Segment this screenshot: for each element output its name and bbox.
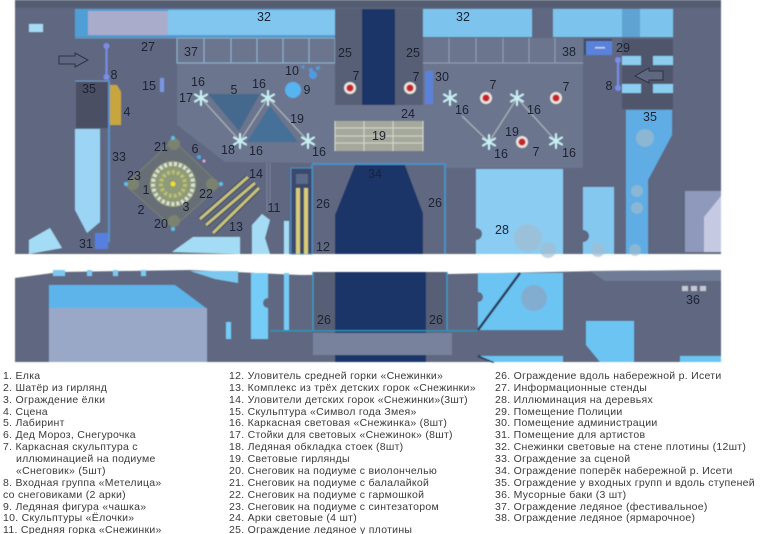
number labels: 35 <box>643 110 657 124</box>
legend column 1: 8. Входная группа «Метелица» <box>3 477 162 489</box>
legend column 3: 37. Ограждение ледяное (фестивальное) <box>495 501 708 513</box>
slides 13 <box>200 177 259 233</box>
number labels: 15 <box>142 79 156 93</box>
ground <box>15 0 721 254</box>
legend column 2: 23. Снеговик на подиуме с синтезатором <box>229 501 439 513</box>
entrance boxes <box>622 56 673 93</box>
administration 30 <box>425 71 433 104</box>
number labels: 6 <box>192 142 199 156</box>
number labels <box>79 10 700 327</box>
number labels: 36 <box>686 293 700 307</box>
number labels: 11 <box>268 201 281 215</box>
plan map: lower part <box>15 270 721 362</box>
wall 32 right <box>423 9 673 37</box>
number labels: 28 <box>495 223 509 237</box>
slide line 11 <box>267 163 270 212</box>
sculptures 10 <box>302 66 320 79</box>
side notches <box>470 228 589 242</box>
number labels: 7 <box>353 69 360 83</box>
number labels: 24 <box>401 107 415 121</box>
bins 36 <box>682 286 706 291</box>
legend column 1: «Снеговик» (5шт) <box>16 465 106 477</box>
father frost 6 <box>197 155 206 162</box>
waterside line <box>270 330 478 332</box>
legend column 1: 1. Елка <box>3 370 40 382</box>
legend column 2: 12. Уловитель средней горки «Снежинки» <box>229 370 443 382</box>
tree 1 <box>150 161 196 207</box>
legend column 2 <box>229 370 476 534</box>
legend column 3: 35. Ограждение у входных групп и вдоль ступеней <box>495 477 755 489</box>
number labels: 20 <box>154 217 168 231</box>
legend column 3: 33. Ограждение за сценой <box>495 453 630 465</box>
number labels: 16 <box>249 144 263 158</box>
number labels: 14 <box>249 167 263 181</box>
legend column 3: 31. Помещение для артистов <box>495 429 645 441</box>
tree <box>521 285 547 311</box>
building <box>685 191 721 252</box>
entrance arch 8 right <box>615 57 621 91</box>
legend column 1: со снеговиками (2 арки) <box>3 489 126 501</box>
legend column 2: 16. Каркасная световая «Снежинка» (8шт) <box>229 417 447 429</box>
number labels: 32 <box>456 10 470 24</box>
garland lines 19 <box>201 98 556 142</box>
ice cup 9 <box>285 82 301 98</box>
number labels: 26 <box>428 196 442 210</box>
legend column 2: 24. Арки световые (4 шт) <box>229 512 357 524</box>
top left fence lines <box>75 38 177 81</box>
number labels: 16 <box>191 75 205 89</box>
legend column 3: 36. Мусорные баки (3 шт) <box>495 489 626 501</box>
arrow right <box>635 68 663 83</box>
top right strip <box>590 270 721 281</box>
legend column 2: 22. Снеговик на подиуме с гармошкой <box>229 489 424 501</box>
notches <box>263 292 483 308</box>
dark side zones 25 <box>335 9 423 105</box>
number labels: 10 <box>285 64 299 78</box>
left blue panel <box>75 129 100 233</box>
legend column 3: 28. Иллюминация на деревьях <box>495 394 653 406</box>
number labels: 32 <box>257 10 271 24</box>
number labels: 4 <box>124 105 131 119</box>
number labels: 16 <box>455 103 469 117</box>
legend column 2: 15. Скульптура «Символ года Змея» <box>229 406 417 418</box>
number labels: 8 <box>111 68 118 82</box>
legend column 3: 34. Ограждение поперёк набережной р. Исети <box>495 465 733 477</box>
legend column 1: иллюминацией на подиуме <box>16 453 156 465</box>
number labels: 38 <box>562 45 576 59</box>
legend column 2: 21. Снеговик на подиуме с балалайкой <box>229 477 429 489</box>
tree illumination <box>514 129 654 258</box>
legend column 2: 20. Снеговик на подиуме с виолончелью <box>229 465 437 477</box>
entrance zone 35 left <box>76 82 108 128</box>
lower blue areas <box>480 321 721 362</box>
arrow left <box>59 53 88 67</box>
number labels: 31 <box>79 237 93 251</box>
number labels: 16 <box>562 146 576 160</box>
legend column 3: 29. Помещение Полиции <box>495 406 623 418</box>
legend column 1 <box>3 370 162 534</box>
number labels: 19 <box>505 125 519 139</box>
number labels: 7 <box>533 145 540 159</box>
number labels: 26 <box>316 197 330 211</box>
number labels: 33 <box>112 150 126 164</box>
number labels: 7 <box>490 78 497 92</box>
blue panel <box>49 285 206 335</box>
number labels: 26 <box>317 313 331 327</box>
garland tent 2 <box>125 140 220 228</box>
number labels: 21 <box>154 140 168 154</box>
blue area 28 <box>476 169 563 254</box>
fence lines 26 <box>311 163 446 254</box>
blue area <box>478 273 563 330</box>
number labels: 16 <box>252 77 266 91</box>
entrance arch 8 left <box>104 43 110 80</box>
plan map: upper part <box>15 0 721 258</box>
small blue block <box>29 24 43 32</box>
legend column 1: 6. Дед Мороз, Снегурочка <box>3 429 136 441</box>
legend column 1: 7. Каркасная скульптура с <box>3 441 138 453</box>
info stand 15 <box>160 78 164 92</box>
blue area right <box>583 187 614 254</box>
legend column 3: 26. Ограждение вдоль набережной р. Исети <box>495 370 722 382</box>
fence 38 <box>423 38 583 63</box>
legend column 2: 18. Ледяная обкладка стоек (8шт) <box>229 441 403 453</box>
stage 4 <box>110 85 121 125</box>
right entrance zone <box>622 39 673 109</box>
legend column 1: 2. Шатёр из гирлянд <box>3 382 107 394</box>
light arches 24 <box>335 121 423 151</box>
number labels: 19 <box>290 112 304 126</box>
column edge lines <box>313 272 447 331</box>
legend column 3: 27. Информационные стенды <box>495 382 647 394</box>
fence 37 <box>177 38 335 63</box>
diagonal line <box>478 273 520 362</box>
lavender building <box>49 308 207 362</box>
number labels: 7 <box>563 80 570 94</box>
number labels: 13 <box>229 220 243 234</box>
legend column 3: 30. Помещение администрации <box>495 417 658 429</box>
river <box>335 272 426 362</box>
number labels: 17 <box>179 91 193 105</box>
number labels: 9 <box>304 83 311 97</box>
number labels: 26 <box>429 313 443 327</box>
number labels: 23 <box>127 169 141 183</box>
number labels: 16 <box>312 145 326 159</box>
number labels: 30 <box>435 70 449 84</box>
ground <box>15 270 721 362</box>
column 26 <box>313 272 447 332</box>
artists room 31 <box>95 233 108 249</box>
legend column 2: 14. Уловители детских горок «Снежинки»(3шт) <box>229 394 468 406</box>
light blue shapes at the bottom <box>29 214 289 254</box>
river south <box>335 165 423 254</box>
slide stripes <box>200 177 259 233</box>
snowman podiums 20-23 <box>124 136 223 231</box>
number labels: 16 <box>527 103 541 117</box>
number labels: 5 <box>231 83 238 97</box>
fence 33 <box>108 80 110 242</box>
legend column 2: 13. Комплекс из трёх детских горок «Снежинки» <box>229 382 476 394</box>
number labels: 19 <box>372 129 386 143</box>
police 29 <box>584 39 612 55</box>
top blocks <box>53 270 238 283</box>
legend column 1: 10. Скульптуры «Ёлочки» <box>3 512 134 524</box>
number labels: 25 <box>338 46 352 60</box>
legend column 2: 17. Стойки для световых «Снежинок» (8шт) <box>229 429 453 441</box>
legend column 1: 5. Лабиринт <box>3 417 65 429</box>
number labels: 7 <box>413 70 420 84</box>
number labels: 12 <box>316 240 330 254</box>
snowmen 7 <box>344 82 562 148</box>
labyrinth 5 <box>208 94 298 142</box>
snowflakes 16 <box>195 91 562 149</box>
legend column 1: 4. Сцена <box>3 406 48 418</box>
number labels: 37 <box>184 45 198 59</box>
number labels: 3 <box>183 200 190 214</box>
legend column 3: 38. Ограждение ледяное (ярмарочное) <box>495 512 695 524</box>
number labels: 8 <box>606 79 613 93</box>
legend column 1: 3. Ограждение ёлки <box>3 394 105 406</box>
number labels: 35 <box>82 82 96 96</box>
strips <box>226 273 289 339</box>
number labels: 18 <box>221 143 235 157</box>
bridge bar <box>313 333 452 355</box>
number labels: 34 <box>368 167 382 181</box>
river north <box>362 9 395 106</box>
legend column 1: 9. Ледяная фигура «чашка» <box>3 501 146 513</box>
legend column 3 <box>495 370 755 524</box>
number labels: 1 <box>143 183 150 197</box>
wall 32 left <box>75 9 335 37</box>
legend column 3: 32. Снежинки световые на стене плотины (12шт) <box>495 441 746 453</box>
number labels: 22 <box>199 187 213 201</box>
legend column 2: 19. Световые гирлянды <box>229 453 350 465</box>
number labels: 25 <box>406 46 420 60</box>
number labels: 27 <box>141 40 155 54</box>
middle slide 12 <box>291 168 312 254</box>
number labels: 2 <box>138 203 145 217</box>
central plaza <box>177 38 583 168</box>
number labels: 16 <box>494 147 508 161</box>
number labels: 29 <box>616 41 630 55</box>
blue path 35 <box>626 110 672 254</box>
